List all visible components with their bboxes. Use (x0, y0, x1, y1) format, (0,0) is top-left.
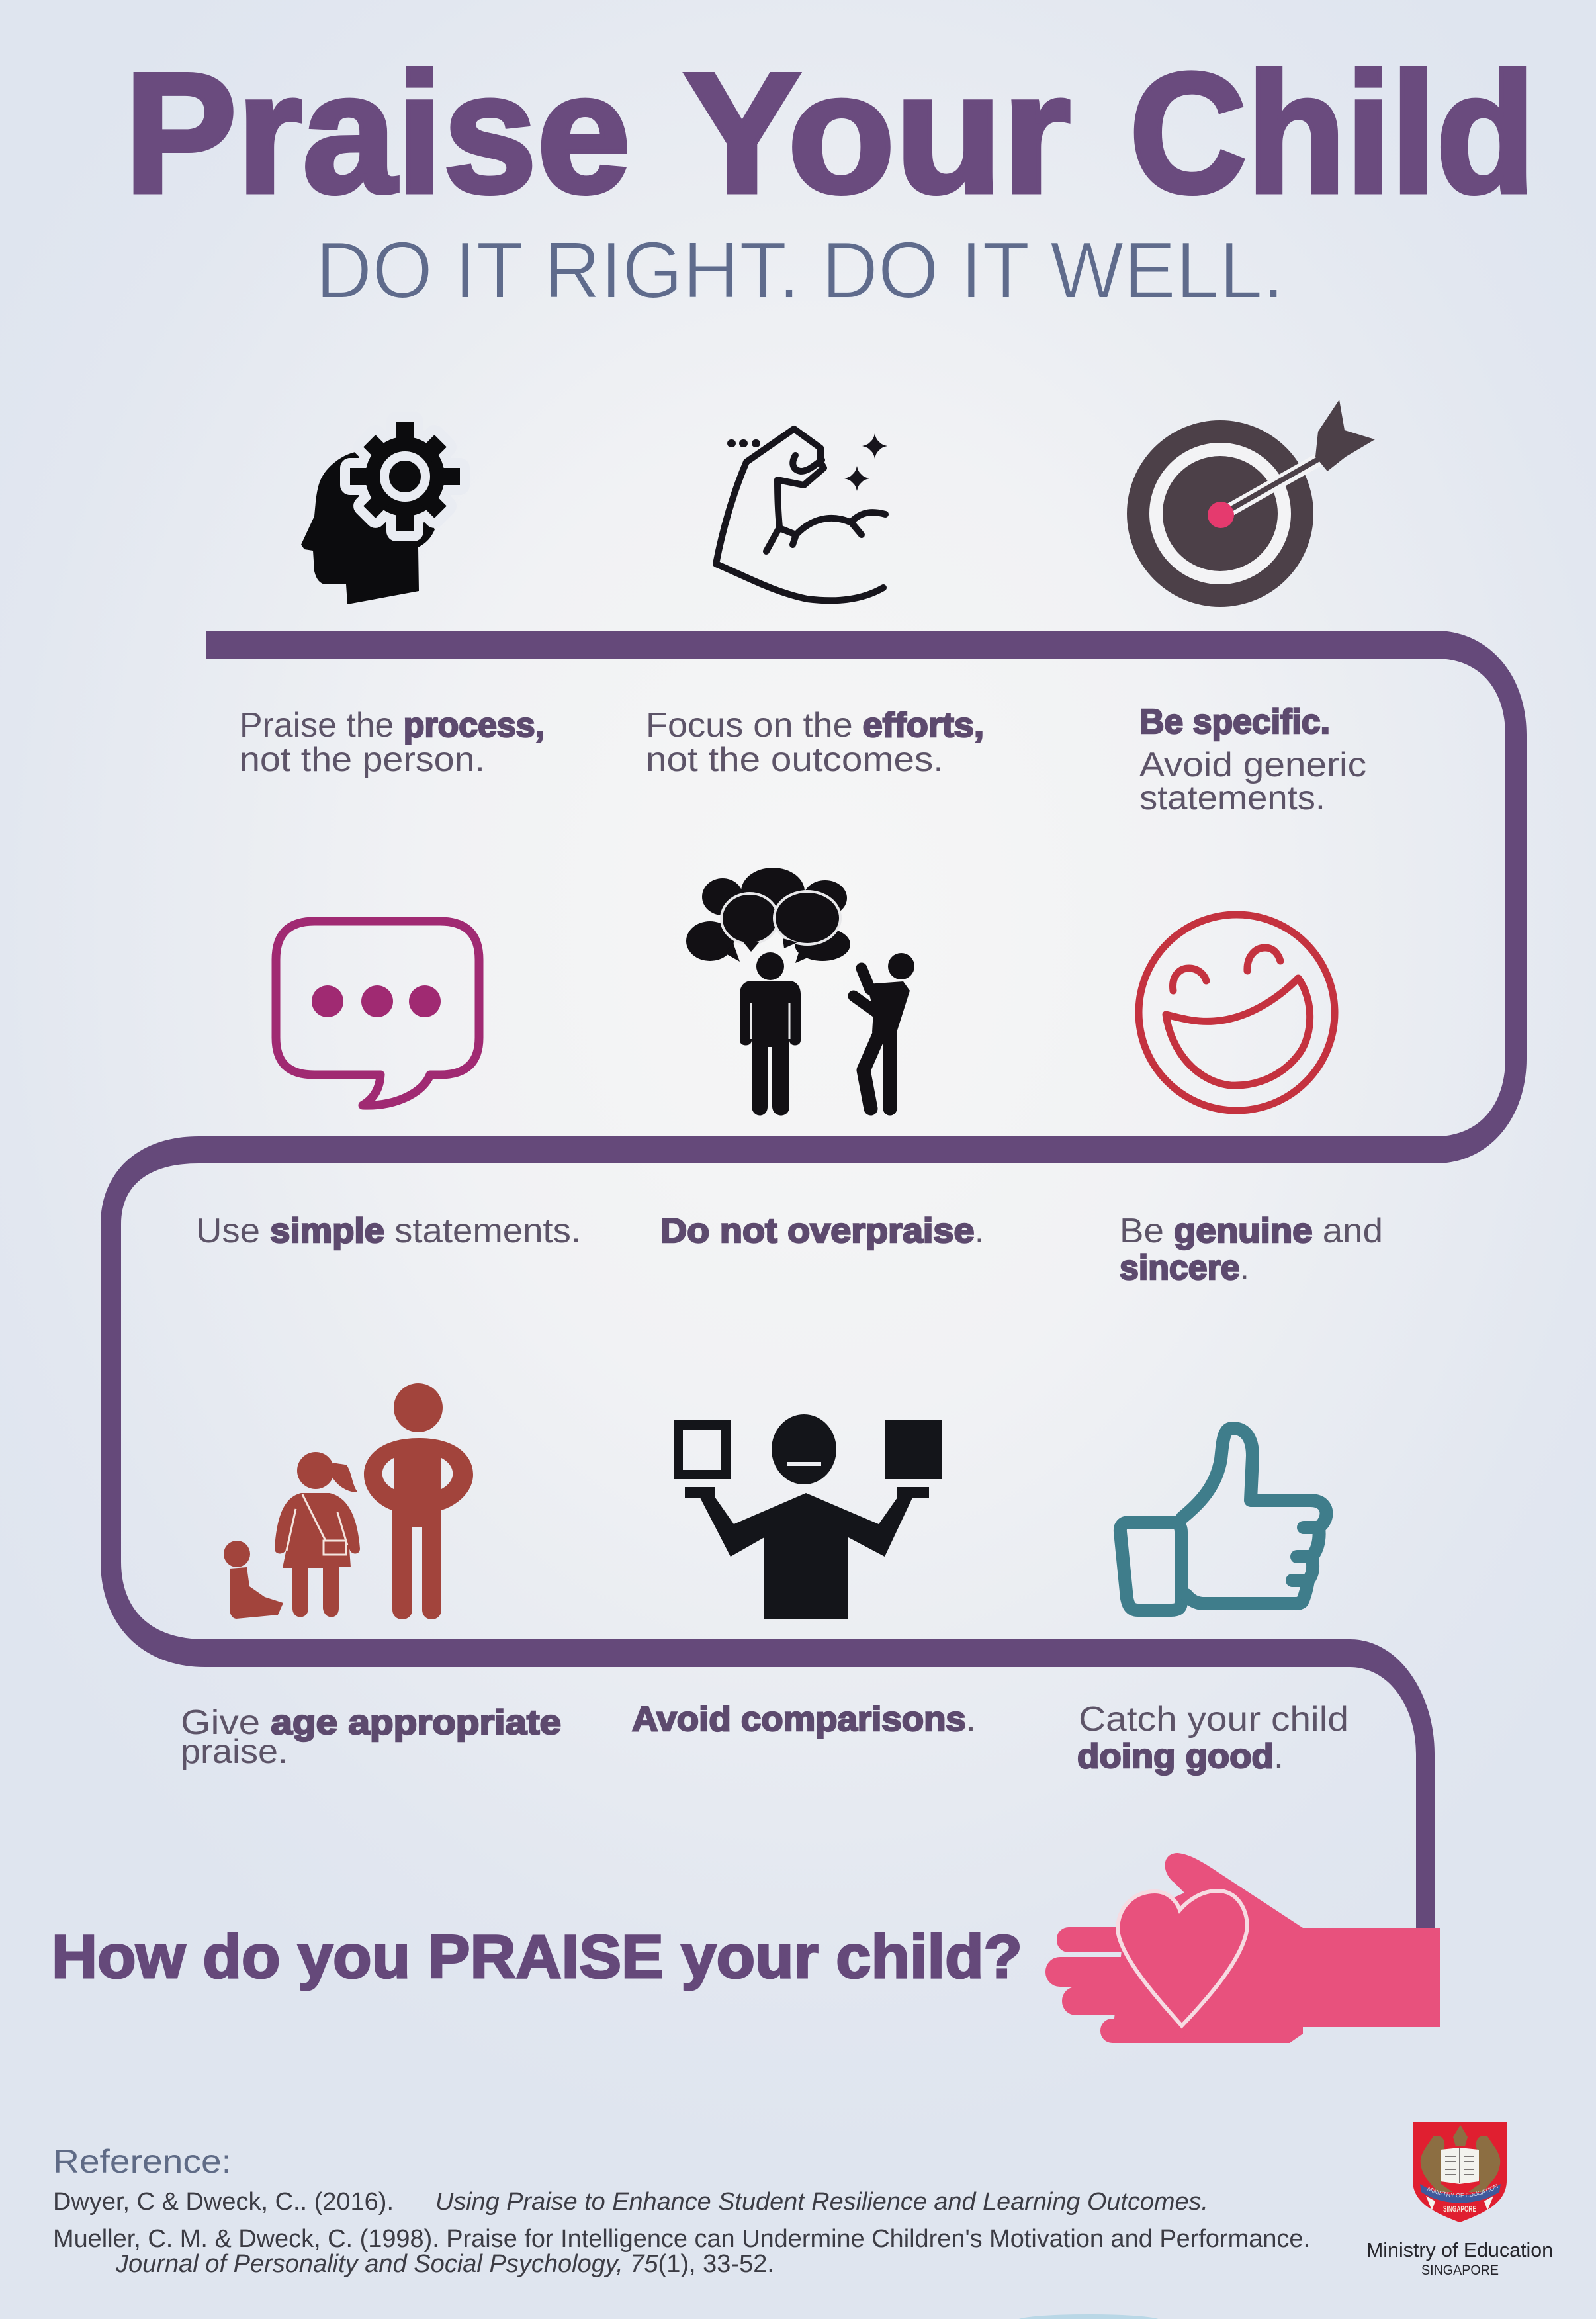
caption: doing good: Catch your child (1079, 1700, 1349, 1739)
caption: be specific: Avoid generic (1139, 746, 1366, 784)
icon: smiley (1139, 915, 1335, 1111)
caption: process: not the person. (240, 741, 485, 779)
icon: family of three (224, 1383, 473, 1619)
title: Your (684, 37, 1071, 228)
caption: do not overpraise: Do not overpraise . (660, 1212, 985, 1250)
caption: genuine and sincere: Be genuine and (1120, 1212, 1383, 1250)
caption: simple statements: Use simple statements. (196, 1212, 581, 1250)
logo: Ministry of Education crest: SINGAPORE (1443, 2204, 1476, 2214)
icon: hand holding heart (1045, 1853, 1440, 2043)
logo: Ministry of Education crest (1413, 2122, 1507, 2222)
logo: Ministry of Education crest: MINISTRY OF EDUCATION (1427, 2184, 1498, 2197)
icon: thumbs up (1120, 1428, 1326, 1610)
references: Using Praise to Enhance Student Resilience and Learning Outcomes. (435, 2188, 1208, 2216)
caption: efforts: not the outcomes. (646, 741, 944, 779)
logo text: SINGAPORE (1421, 2263, 1499, 2278)
icon: person comparing squares (674, 1414, 942, 1619)
bottom edge mark (1017, 2314, 1160, 2319)
references: Reference: (53, 2143, 232, 2180)
caption: age appropriate: praise. (181, 1733, 288, 1771)
icon: speech bubble (276, 921, 479, 1105)
caption: be specific: statements. (1139, 779, 1325, 817)
subtitle: DO IT RIGHT. DO IT WELL. (316, 225, 1284, 315)
caption: genuine and sincere: sincere. (1120, 1249, 1249, 1287)
icon: people with speech clouds (686, 868, 914, 1116)
closing question: How do you PRAISE your child? (52, 1923, 1022, 1991)
references: Dwyer, C & Dweck, C.. (2016). (53, 2188, 394, 2216)
title (124, 37, 1535, 228)
winding path (101, 631, 1527, 1934)
references (53, 2143, 1310, 2278)
caption: efforts: Focus on the efforts, (646, 706, 984, 745)
caption: be specific: Be specific. (1139, 703, 1330, 741)
title: Child (1130, 37, 1535, 228)
caption: age appropriate: Give age appropriate (181, 1704, 561, 1742)
caption: doing good: doing good . (1077, 1737, 1284, 1776)
caption: process (240, 706, 545, 779)
title: Praise (124, 37, 631, 228)
caption: be specific (1139, 703, 1366, 817)
icon: head with gear (301, 422, 460, 604)
caption: process: Praise the process, (240, 706, 545, 745)
icon: flexed arm (716, 429, 887, 600)
caption: age appropriate (181, 1704, 561, 1771)
logo text (1366, 2238, 1553, 2278)
icon: target with arrow (1127, 400, 1375, 607)
logo text: Ministry of Education (1366, 2238, 1553, 2261)
caption: avoid comparisons: Avoid comparisons . (632, 1700, 976, 1739)
caption: efforts (646, 706, 984, 779)
caption: genuine and sincere (1120, 1212, 1383, 1287)
references: Journal of Personality and Social Psychology, 75(1), 33-52. (115, 2250, 774, 2278)
caption: doing good (1077, 1700, 1349, 1776)
references: Mueller, C. M. & Dweck, C. (1998). Praise for Intelligence can Undermine Children's Motivation and Performance. (53, 2225, 1310, 2253)
